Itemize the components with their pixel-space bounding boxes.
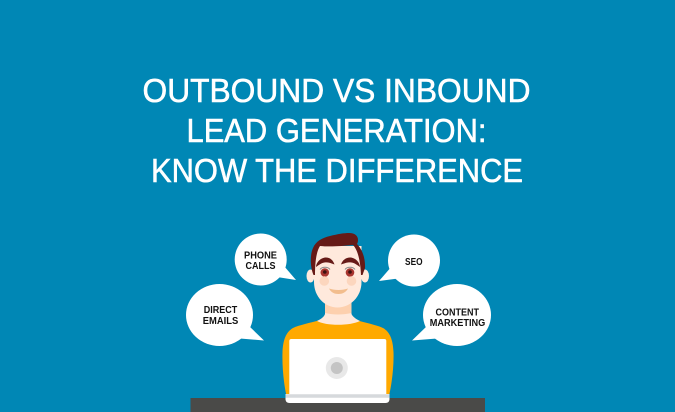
desk — [190, 398, 485, 412]
title — [142, 72, 530, 189]
cheeks — [320, 276, 356, 286]
neck shadow — [325, 300, 352, 314]
eyes — [320, 267, 355, 277]
speech bubble: direct emails — [186, 284, 264, 346]
hair — [311, 233, 365, 275]
speech bubble: phone calls — [235, 234, 296, 286]
laptop logo — [326, 357, 348, 379]
speech bubble: seo — [379, 234, 440, 286]
speech bubble: phone calls: CALLS — [246, 261, 276, 272]
title: OUTBOUND VS INBOUND — [142, 72, 530, 109]
orange sweater — [282, 320, 394, 396]
smile — [329, 288, 348, 294]
speech bubble: content marketing: MARKETING — [430, 318, 485, 329]
neck — [317, 298, 360, 325]
speech bubble: content marketing: CONTENT — [436, 307, 479, 318]
speech bubble: direct emails: EMAILS — [203, 316, 239, 327]
laptop — [286, 339, 390, 403]
eyebrows — [316, 258, 360, 267]
person illustration — [282, 233, 394, 396]
speech bubble: seo: SEO — [405, 257, 423, 268]
speech bubble: content marketing — [412, 284, 491, 346]
speech bubble: direct emails: DIRECT — [204, 305, 237, 316]
ears — [306, 270, 369, 282]
speech bubble: phone calls: PHONE — [244, 250, 277, 261]
laptop base — [286, 394, 390, 403]
face — [314, 246, 362, 308]
title: LEAD GENERATION: — [186, 112, 486, 149]
title: KNOW THE DIFFERENCE — [151, 152, 523, 189]
